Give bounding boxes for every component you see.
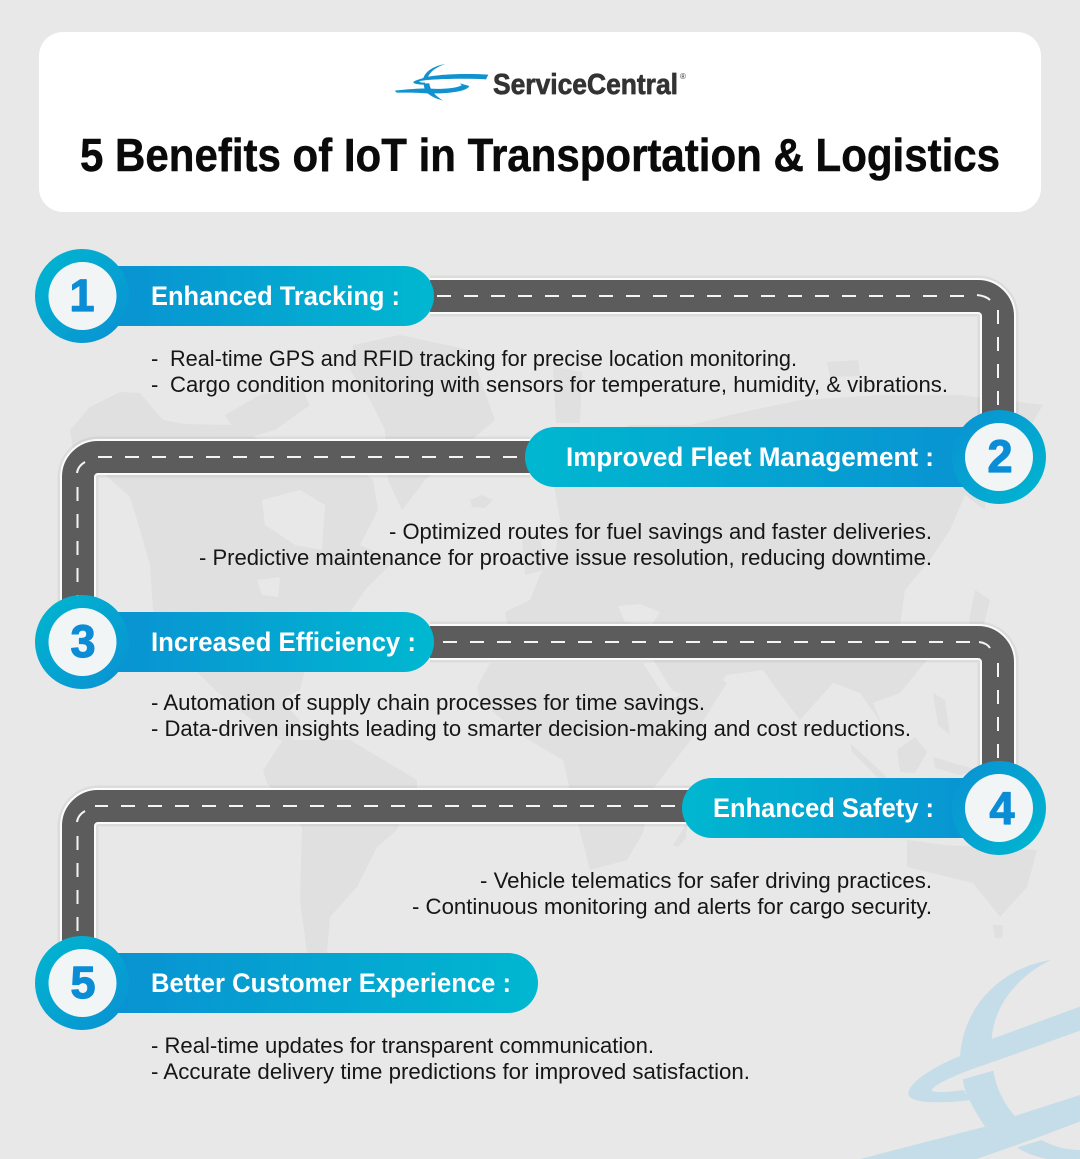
step 4 heading: Enhanced Safety : xyxy=(713,793,934,823)
step 5 heading: Better Customer Experience : xyxy=(151,968,511,998)
step 3 number: 3 xyxy=(70,616,96,667)
road 2 xyxy=(77,457,530,610)
step 2 text: - Optimized routes for fuel savings and faster deliveries. xyxy=(389,519,932,544)
step 4 text: - Continuous monitoring and alerts for cargo security. xyxy=(412,894,932,919)
logo xyxy=(395,64,686,101)
step 3 text: - Data-driven insights leading to smarter decision-making and cost reductions. xyxy=(151,716,911,741)
step 4 badge xyxy=(952,761,1046,855)
step 3 heading: Increased Efficiency : xyxy=(151,627,416,657)
step 4 text: - Vehicle telematics for safer driving practices. xyxy=(480,868,932,893)
step 4: Enhanced Safety xyxy=(412,761,1046,919)
step 1 banner xyxy=(90,266,434,326)
step 3 text: - Automation of supply chain processes for time savings. xyxy=(151,690,705,715)
step 1: Enhanced Tracking xyxy=(35,249,948,397)
map water shapes xyxy=(257,490,660,624)
step 2 number: 2 xyxy=(987,431,1013,482)
step 2 banner xyxy=(525,427,1005,487)
road 3 xyxy=(430,642,998,775)
step 2 text xyxy=(199,519,932,570)
logo icon xyxy=(395,64,488,101)
world map xyxy=(70,335,1043,953)
logo registered mark: ® xyxy=(680,72,686,81)
header card xyxy=(39,32,1041,212)
step 5 badge xyxy=(35,936,129,1030)
step 5 text: - Accurate delivery time predictions for improved satisfaction. xyxy=(151,1059,750,1084)
step 2: Improved Fleet Management xyxy=(199,410,1046,570)
step 4 banner xyxy=(682,778,1005,838)
logo wordmark: ServiceCentral xyxy=(493,69,678,101)
road 4 xyxy=(77,806,690,950)
step 3: Increased Efficiency xyxy=(35,595,911,741)
step 5 number: 5 xyxy=(70,957,96,1008)
step 1 text: - xyxy=(151,372,158,397)
step 5: Better Customer Experience xyxy=(35,936,750,1084)
step 3 text xyxy=(151,690,911,741)
step 5 text: - Real-time updates for transparent communication. xyxy=(151,1033,654,1058)
step 1 heading: Enhanced Tracking : xyxy=(151,281,400,311)
step 2 heading: Improved Fleet Management : xyxy=(566,442,934,472)
step 1 number: 1 xyxy=(69,270,95,321)
step 1 text: - xyxy=(151,346,158,371)
watermark logo xyxy=(860,960,1080,1159)
step 5 text xyxy=(151,1033,750,1084)
step 1 text xyxy=(151,346,948,397)
title: 5 Benefits of IoT in Transportation & Logistics xyxy=(80,129,1000,181)
road 1 xyxy=(430,295,998,425)
step 2 badge xyxy=(952,410,1046,504)
step 1 text: Real-time GPS and RFID tracking for precise location monitoring. xyxy=(170,346,797,371)
step 1 badge xyxy=(35,249,129,343)
step 5 banner xyxy=(90,953,538,1013)
step 4 text xyxy=(412,868,932,919)
step 3 badge xyxy=(35,595,129,689)
step 2 text: - Predictive maintenance for proactive issue resolution, reducing downtime. xyxy=(199,545,932,570)
step 3 banner xyxy=(90,612,434,672)
step 4 number: 4 xyxy=(989,783,1015,834)
step 1 text: Cargo condition monitoring with sensors for temperature, humidity, & vibrations. xyxy=(170,372,948,397)
